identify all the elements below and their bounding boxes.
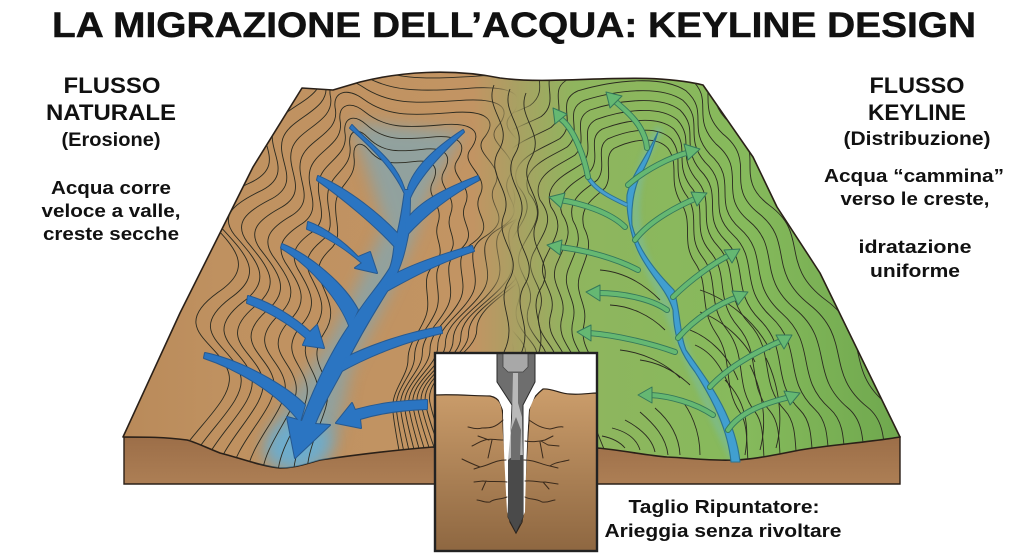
terrain surface: [123, 72, 900, 468]
description right: [824, 166, 1004, 281]
arrow outlines: [559, 102, 790, 430]
soil cracks: [462, 420, 569, 502]
description left: Acqua corre: [51, 178, 171, 198]
left text: natural flow: [42, 73, 180, 244]
subheading: distribuzione: (Distribuzione): [844, 129, 990, 150]
description right: idratazione: [858, 237, 972, 257]
inset background: [435, 353, 597, 551]
keyline flow: stream and green arrows: [547, 92, 800, 462]
water soak glow: [262, 122, 735, 472]
subheading: erosione: (Erosione): [62, 130, 160, 151]
inset caption: Taglio Ripuntatore:: [628, 497, 820, 517]
contour lines: centre of the hill: [492, 85, 545, 360]
description left: veloce a valle,: [42, 201, 180, 221]
left text: natural flow: NATURALE: [46, 100, 176, 125]
stream side channel: [588, 177, 627, 205]
heading: flusso keyline: FLUSSO: [870, 73, 964, 98]
soil: [435, 389, 597, 551]
right text: keyline flow: [824, 73, 1004, 281]
inset caption: [604, 497, 842, 541]
description left: creste secche: [43, 224, 179, 244]
description right: uniforme: [870, 261, 960, 281]
description left: [42, 178, 180, 244]
description right: verso le creste,: [840, 189, 990, 209]
right text: keyline flow: KEYLINE: [868, 100, 966, 125]
terrain front soil strip: [124, 437, 900, 484]
heading: flusso naturale: FLUSSO: [64, 73, 160, 98]
arrow heads: [547, 92, 800, 405]
block diagram: terrain: [122, 71, 901, 485]
description right: Acqua “cammina”: [824, 166, 1004, 186]
central stream: [627, 132, 740, 462]
inset caption: Arieggia senza rivoltare: [604, 521, 842, 541]
inset frame: [435, 353, 597, 551]
ripper shank: [497, 353, 535, 532]
contour lines: natural side: [190, 75, 515, 468]
contour lines: keyline side: [514, 80, 884, 459]
inset: subsoiler cut: [435, 353, 597, 551]
title: LA MIGRAZIONE DELL’ACQUA: KEYLINE DESIGN: [52, 6, 976, 45]
natural flow: blue erosion channels and arrows: [204, 125, 479, 458]
slit: [497, 396, 535, 532]
